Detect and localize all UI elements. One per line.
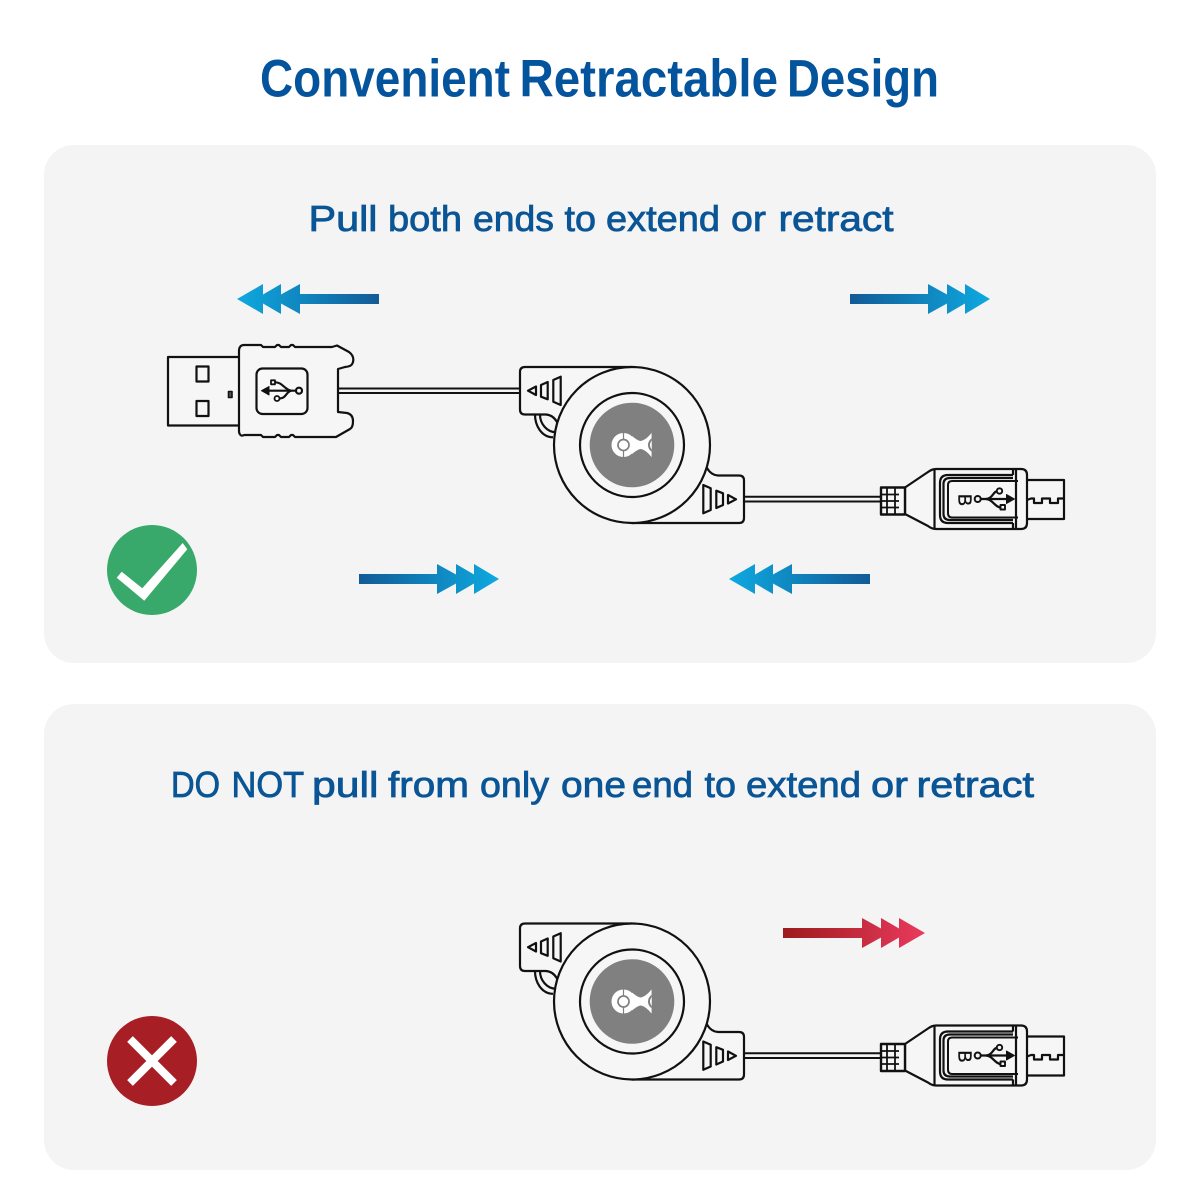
arrow: bottom left, pointing right [359, 564, 499, 594]
arrow: top right, pointing right [850, 284, 990, 314]
heading: do not pull: extend [746, 764, 861, 805]
heading: do not pull: one [561, 764, 626, 805]
label: B: B [954, 494, 974, 506]
icon: cable reel [520, 367, 744, 523]
heading: do not pull: pull [312, 764, 378, 805]
heading: pull both ends: ends [473, 198, 554, 239]
heading: pull both ends: retract [778, 198, 894, 239]
heading: pull both ends: Pull [308, 198, 378, 239]
icon: green check [107, 525, 197, 615]
arrow: top left, pointing left [237, 284, 379, 314]
icon: reel logo [612, 990, 652, 1014]
heading: do not pull: retract [916, 764, 1034, 805]
icon: red cross [107, 1016, 197, 1106]
heading: do not pull: to [704, 764, 736, 805]
label: B: B [954, 1050, 974, 1063]
heading: do not pull: end [632, 764, 693, 805]
icon: cable reel [520, 924, 744, 1080]
heading: do not pull: from [388, 764, 469, 805]
heading: pull both ends: both [388, 198, 462, 239]
icon: micro-USB connector [881, 469, 1064, 529]
heading: do not pull: only [480, 764, 549, 805]
heading: pull both ends: extend [606, 198, 720, 239]
panel: incorrect usage [44, 704, 1156, 1170]
title: Retractable [520, 50, 778, 108]
icon: USB-A connector [168, 345, 353, 437]
cable: reel to micro-USB [745, 497, 882, 502]
cable: reel to micro-USB [745, 1053, 882, 1058]
cable: USB-A to reel [339, 388, 521, 393]
heading: do not pull: NOT [232, 764, 304, 805]
panel: correct usage [44, 145, 1156, 663]
icon: micro-USB connector [881, 1026, 1064, 1086]
icon: reel logo [612, 433, 652, 457]
title: Design [787, 50, 939, 108]
heading: do not pull: or [871, 764, 908, 805]
heading: pull both ends: or [731, 198, 766, 239]
device: reel with micro-USB [520, 924, 1064, 1086]
title: Convenient [260, 50, 510, 108]
heading: do not pull: DO [171, 764, 220, 805]
arrow: red, pointing right [783, 918, 925, 948]
arrow: bottom right, pointing left [729, 564, 870, 594]
heading: pull both ends: to [564, 198, 596, 239]
